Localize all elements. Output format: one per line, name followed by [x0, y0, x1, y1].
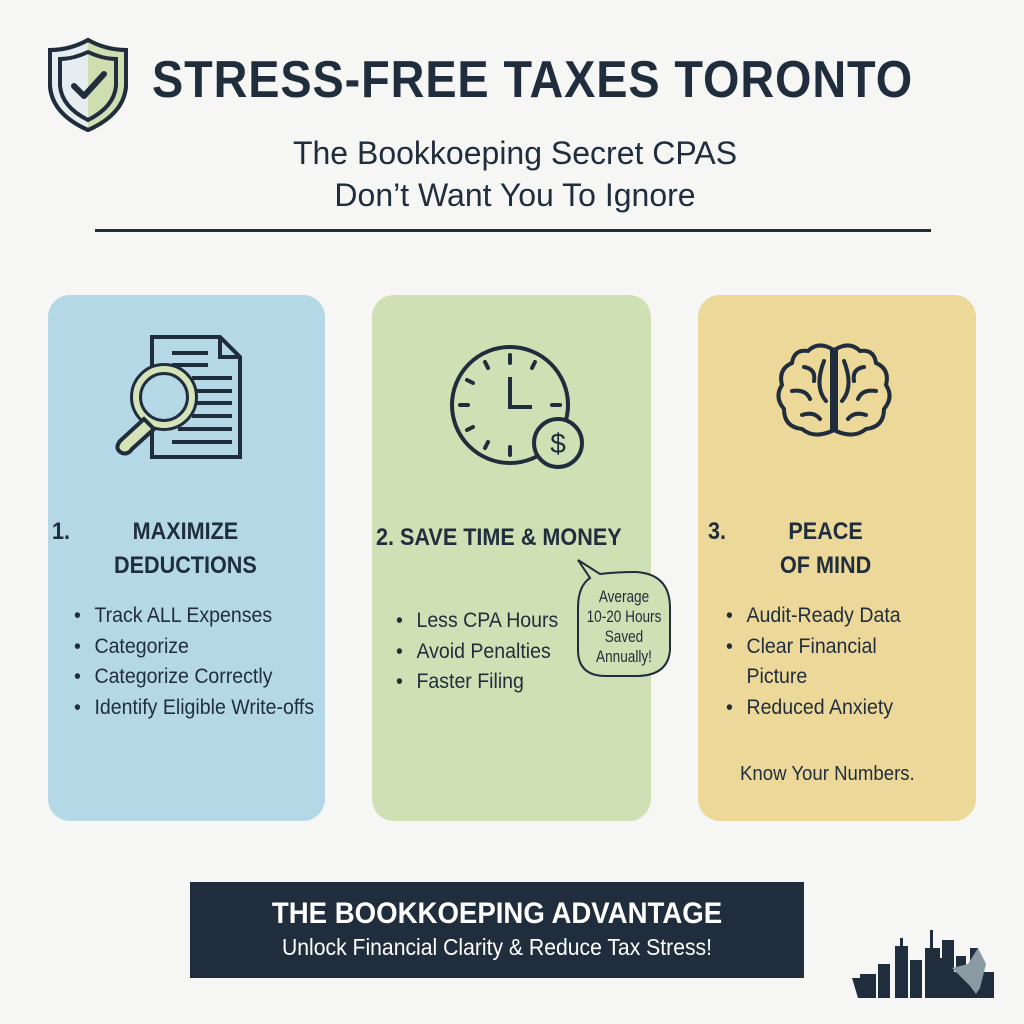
list [74, 604, 314, 718]
panel: maximize deductions: DEDUCTIONS [114, 552, 257, 579]
icon: clock with dollar: $ [550, 428, 566, 459]
list: Clear Financial Picture [746, 634, 877, 688]
list: Avoid Penalties [416, 640, 551, 662]
icon: document magnifier [115, 335, 242, 459]
banner: bookkeeping advantage [190, 882, 804, 978]
icon: skyline [852, 930, 994, 998]
banner: bookkeeping advantage: THE BOOKKOEPING ADVANTAGE [272, 897, 722, 930]
icon: brain [776, 343, 892, 437]
panel: maximize deductions [48, 295, 325, 821]
panel: peace of mind: PEACE [788, 518, 863, 545]
panel: peace of mind: OF MIND [780, 552, 871, 579]
panel: save time & money [372, 295, 651, 821]
callout: hours saved: Annually! [596, 648, 652, 666]
panel: maximize deductions: MAXIMIZE [133, 518, 238, 545]
heading: 1. [52, 518, 70, 545]
callout: hours saved: Saved [605, 628, 643, 646]
subtitle [293, 135, 737, 213]
list [726, 604, 901, 718]
icon: clock with dollar [450, 345, 584, 469]
list: Reduced Anxiety [746, 696, 893, 718]
icon: shield [48, 38, 128, 132]
list: Categorize Correctly [94, 665, 272, 688]
list: Less CPA Hours [416, 609, 558, 632]
callout: hours saved [577, 559, 671, 677]
heading: 3. [708, 518, 726, 545]
list [396, 609, 558, 693]
subtitle: The Bookkoeping Secret CPAS [293, 135, 737, 171]
callout: hours saved: Average [599, 588, 649, 606]
callout: hours saved: 10-20 Hours [587, 608, 662, 626]
heading: 2. SAVE TIME & MONEY [376, 524, 622, 551]
list: Identify Eligible Write-offs [94, 696, 314, 718]
panel: peace of mind [698, 295, 976, 821]
list: Categorize [94, 634, 189, 658]
title: STRESS-FREE TAXES TORONTO [152, 51, 913, 109]
subtitle: Don’t Want You To Ignore [334, 177, 696, 213]
tagline: Know Your Numbers. [740, 763, 915, 785]
list: Faster Filing [416, 670, 524, 693]
list: Audit-Ready Data [746, 604, 901, 627]
list: Track ALL Expenses [94, 604, 272, 627]
banner: bookkeeping advantage: Unlock Financial Clarity & Reduce Tax Stress! [282, 934, 712, 960]
